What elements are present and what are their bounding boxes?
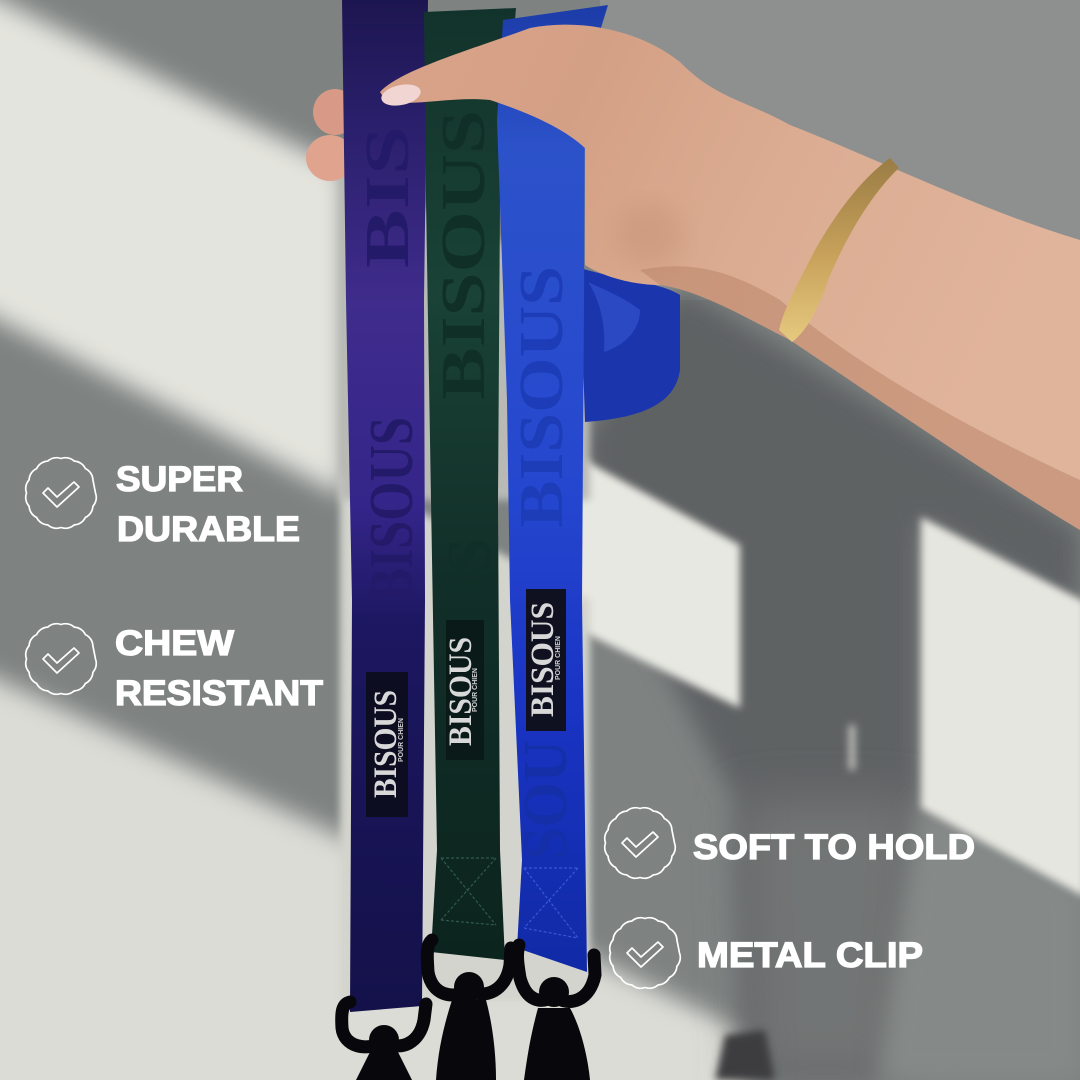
blue leash: [497, 5, 608, 972]
blue woven logo: BISOUS: [508, 266, 576, 528]
green leash: [424, 8, 516, 960]
purple leash: BISOUS: [358, 417, 426, 602]
blue leash loop: [580, 268, 680, 422]
label: METAL CLIP: [697, 936, 923, 975]
green woven logo: BISOUS: [430, 110, 498, 400]
green label: POUR CHIEN: [472, 668, 479, 712]
feature: soft to hold: [605, 808, 975, 878]
purple woven logo: BIS: [354, 126, 422, 268]
blue stitching: [524, 868, 578, 938]
feature: chew resistant: [26, 624, 323, 713]
gold bracelet: [779, 158, 899, 342]
blue label: BISOUS: [525, 602, 561, 717]
fingernail: [379, 81, 423, 109]
metal clips: [342, 940, 595, 1080]
icon: badge check: [605, 808, 675, 878]
purple label: POUR CHIEN: [398, 718, 405, 762]
blue label: POUR CHIEN: [555, 636, 562, 680]
purple leash: [342, 0, 428, 1012]
green stitching: [441, 858, 496, 925]
blue leash: SOU: [512, 740, 580, 860]
purple label: BISOUS: [368, 690, 404, 798]
icon: badge check: [610, 918, 680, 988]
green leash clip: [427, 940, 511, 1080]
hand shadow on wall: [580, 285, 1080, 1080]
hand and forearm: [379, 25, 1080, 530]
label: SOFT TO HOLD: [693, 828, 975, 867]
clip shadow on wall: [715, 1030, 775, 1080]
palm shading: [616, 203, 684, 267]
label: DURABLE: [117, 510, 300, 549]
label: CHEW: [115, 624, 234, 663]
feature: metal clip: [610, 918, 923, 988]
green label: BISOUS: [443, 637, 479, 746]
label: SUPER: [116, 460, 243, 499]
fingers behind leash: [306, 89, 357, 181]
icon: badge check: [26, 624, 96, 694]
blue leash clip: [517, 945, 595, 1080]
purple leash clip: [342, 1002, 426, 1080]
label: RESISTANT: [115, 674, 323, 713]
icon: badge check: [26, 458, 96, 528]
feature: super durable: [26, 458, 300, 549]
green leash: IS: [436, 538, 504, 598]
